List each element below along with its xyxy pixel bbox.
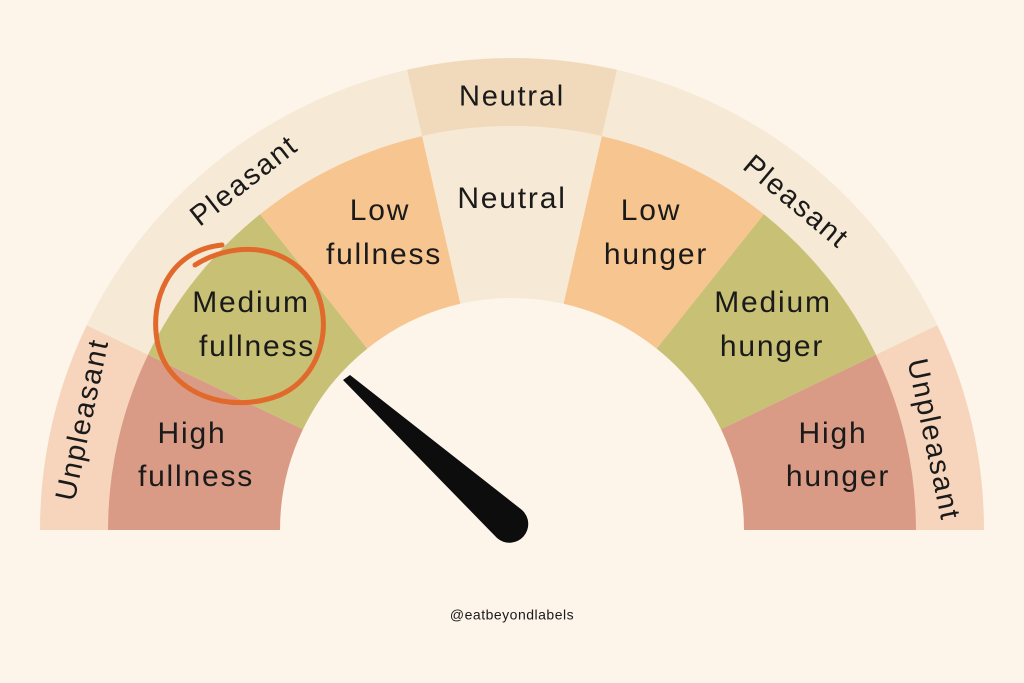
segment: low hunger — [564, 136, 764, 349]
segment: high fullness — [108, 355, 303, 530]
segment: medium hunger: Medium — [714, 286, 832, 319]
segment: medium fullness: Medium — [192, 286, 310, 319]
segment: low fullness — [260, 136, 460, 349]
segment: high fullness: High — [158, 417, 226, 450]
segment: low hunger: hunger — [604, 238, 708, 271]
highlight circle — [156, 245, 323, 403]
needle — [343, 375, 528, 543]
segment: neutral: Neutral — [457, 182, 567, 215]
outer band: unpleasant right — [876, 325, 984, 530]
segment: low hunger: Low — [621, 194, 681, 227]
segment: medium hunger: hunger — [720, 330, 824, 363]
outer band: unpleasant left — [40, 325, 148, 530]
segment: high hunger: High — [799, 417, 867, 450]
segment: high hunger — [721, 355, 916, 530]
outer band: pleasant right: Pleasant — [737, 149, 855, 255]
segment: neutral — [422, 126, 602, 304]
outer band: neutral: Neutral — [459, 81, 565, 113]
outer band: unpleasant left: Unpleasant — [50, 336, 115, 504]
segment: high fullness: fullness — [138, 460, 254, 493]
outer band: pleasant right — [602, 70, 937, 355]
credit: @eatbeyondlabels — [450, 607, 574, 623]
outer band: pleasant left: Pleasant — [184, 129, 304, 233]
outer band: unpleasant right: Unpleasant — [901, 356, 966, 524]
segment: medium fullness — [148, 214, 367, 429]
segment: high hunger: hunger — [786, 460, 890, 493]
segment: medium fullness: fullness — [199, 330, 315, 363]
segment: medium hunger — [657, 214, 876, 429]
segment: low fullness: fullness — [326, 238, 442, 271]
segment: low fullness: Low — [350, 194, 410, 227]
outer band: pleasant left — [87, 70, 422, 355]
outer band: neutral — [407, 58, 617, 136]
